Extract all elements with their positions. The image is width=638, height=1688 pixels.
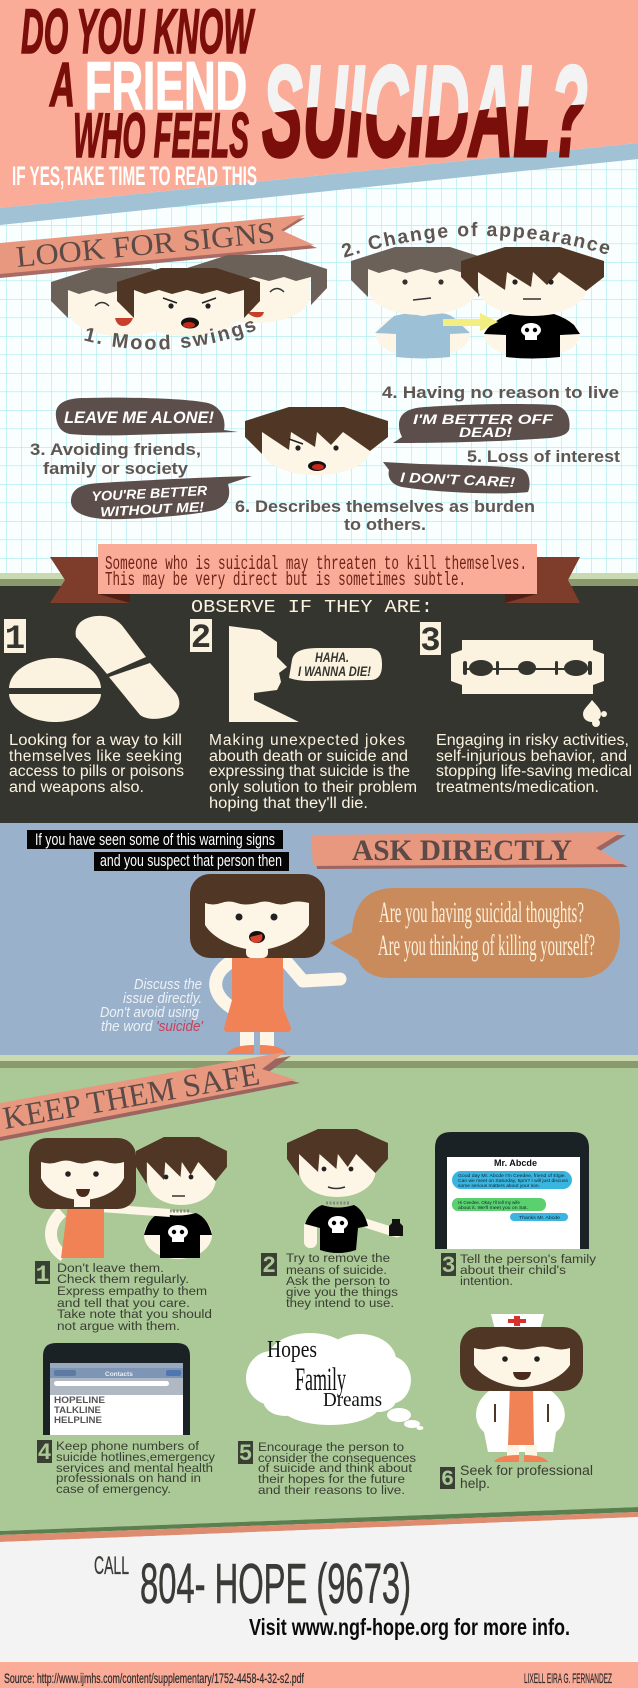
shoes <box>227 1045 254 1054</box>
icon: pills <box>9 616 179 722</box>
text: safe 6: Seek for professional <box>460 1462 593 1478</box>
ribbon: look for signs: LOOK FOR SIGNS <box>15 216 276 274</box>
text: safe 5: of suicide and think about <box>258 1461 413 1475</box>
sign: 3 avoiding friends <box>30 440 201 478</box>
text: item 2: Making unexpected jokes <box>209 732 405 749</box>
cloud: hopes family dreams: Dreams <box>323 1389 382 1411</box>
phone: text messages: Thanks Mr. Abcde <box>519 1215 561 1220</box>
coat <box>476 1385 565 1452</box>
panel: title header: WHO FEELS <box>73 101 249 171</box>
title: suicidal <box>262 64 588 159</box>
phone: text messages: Can we meet on Saturday, 5pm? I will just discuss <box>458 1178 569 1183</box>
blue diagonal band <box>0 143 638 225</box>
text: item 2 <box>209 732 417 812</box>
text: safe 1: Don't leave them. <box>57 1261 164 1275</box>
text: item 3: treatments/medication. <box>436 779 599 796</box>
number tile 5: 5 <box>239 1441 252 1467</box>
text: safe 1: Check them regularly. <box>57 1272 189 1286</box>
cloud: hopes family dreams <box>246 1333 424 1430</box>
number 2: 2 <box>191 620 211 658</box>
icon: bottle <box>389 1219 403 1236</box>
text: safe 5 <box>258 1440 416 1497</box>
head: happy right <box>184 255 327 323</box>
text: item 3: Engaging in risky activities, <box>436 732 629 749</box>
phone: text messages: some serious matters about your son. <box>458 1183 540 1188</box>
note: discuss directly: issue directly. <box>123 990 202 1007</box>
text: item 3: stopping life-saving medical <box>436 763 632 780</box>
panel: call to action <box>0 1517 638 1662</box>
text: item 1: and weapons also. <box>9 779 144 796</box>
black caption: warning signs <box>27 830 289 871</box>
text: safe 3: intention. <box>460 1274 513 1288</box>
label: 2 change of appearance: 2. Change of appearance <box>342 222 610 258</box>
girl face <box>41 1160 124 1200</box>
bubble: haha: I WANNA DIE! <box>298 664 371 679</box>
phone: text messages: about it. We'll meet you on Sat. <box>458 1205 528 1210</box>
text: safe 3 <box>460 1252 597 1288</box>
source: Source: http://www.ijmhs.com/content/supplementary/1752-4458-4-32-s2.pdf <box>4 1670 304 1686</box>
illustration: boy with bottle <box>287 1129 403 1253</box>
note: discuss directly: Don't avoid using <box>100 1004 200 1021</box>
girl dress <box>61 1204 104 1258</box>
text: safe 4: professionals on hand in <box>56 1471 201 1485</box>
hair <box>460 1327 583 1391</box>
bubble: i don't care: I DON'T CARE! <box>400 469 516 490</box>
phone: contacts: HELPLINE <box>54 1415 102 1426</box>
text: safe 2: Ask the person to <box>286 1274 390 1288</box>
panel: ask directly blue section <box>0 823 638 1055</box>
bubble: you're better without me: YOU'RE BETTER <box>91 483 208 504</box>
bubble: i'm better off dead: DEAD! <box>459 425 513 440</box>
bubble: haha <box>289 648 382 681</box>
text: safe 2: means of suicide. <box>286 1263 387 1277</box>
text: item 3: self-injurious behavior, and <box>436 748 627 765</box>
phone: text messages: Good day Mr. Abcde I'm Ceedee, friend of Elgie. <box>458 1173 566 1178</box>
text: item 1: themselves like seeking <box>9 748 182 765</box>
number tile 4: 4 <box>38 1440 52 1466</box>
text: item 1: Looking for a way to kill <box>9 732 182 749</box>
text: item 2: abouth death or suicide and <box>209 748 408 765</box>
text: safe 6: help. <box>460 1475 490 1491</box>
subtitle: IF YES,TAKE TIME TO READ THIS <box>12 161 257 191</box>
head: happy left <box>51 268 194 336</box>
sign: 3 avoiding friends: 3. Avoiding friends, <box>30 440 201 459</box>
text: safe 4: services and mental health <box>56 1461 213 1475</box>
text: item 2: expressing that suicide is the <box>209 763 410 780</box>
text: safe 1: not argue with them. <box>57 1319 180 1333</box>
phone: contacts <box>43 1343 190 1435</box>
legs and shoes <box>507 1445 519 1456</box>
text: safe 5: Encourage the person to <box>258 1440 404 1454</box>
note: discuss directly: the word 'suicide' <box>101 1018 204 1035</box>
ribbon: keep them safe: KEEP THEM SAFE <box>0 1055 262 1136</box>
phone number: 804- HOPE (9673) <box>140 1552 411 1616</box>
illustration: mood swings heads <box>51 255 327 336</box>
bubble: haha: HAHA. <box>315 650 349 665</box>
footer <box>0 1662 638 1688</box>
arrow: yellow <box>443 313 498 331</box>
sign: 6 describes themselves: to others. <box>344 515 426 534</box>
number 1: 1 <box>5 621 25 659</box>
dress <box>224 951 291 1032</box>
background: signs grid <box>0 140 638 580</box>
text: safe 5: their hopes for the future <box>258 1472 405 1486</box>
text: safe 1: Express empathy to them <box>57 1284 207 1298</box>
panel: keep them safe green section <box>0 1052 638 1542</box>
sign: 6 describes themselves: 6. Describes themselves as burden <box>235 497 535 516</box>
note: discuss directly: Discuss the <box>134 976 202 993</box>
dress <box>508 1385 534 1445</box>
number tile 6: 6 <box>441 1467 454 1492</box>
text: safe 2: Try to remove the <box>286 1251 390 1265</box>
bubble: i'm better off dead <box>393 404 570 443</box>
ribbon: ask directly <box>311 832 628 869</box>
number tile 2: 2 <box>262 1253 276 1279</box>
panel: title header <box>0 0 638 225</box>
bubble: i don't care <box>383 462 530 493</box>
face <box>205 902 309 950</box>
text: item 1 <box>9 732 184 796</box>
red cross <box>508 1316 526 1326</box>
text: safe 3: about their child's <box>460 1263 566 1277</box>
phone: contacts: HOPELINE <box>54 1395 105 1406</box>
bubble: leave me alone: LEAVE ME ALONE! <box>64 408 214 427</box>
black caption: warning signs: If you have seen some of this warning signs <box>35 830 275 849</box>
number 3: 3 <box>420 623 441 661</box>
text: safe 1: and tell that you care. <box>57 1296 190 1310</box>
text: item 3 <box>436 732 632 796</box>
title: friend: FRIEND <box>85 48 247 124</box>
nurse cap <box>491 1314 544 1330</box>
text: safe 5: consider the consequences <box>258 1451 416 1465</box>
ribbon: look for signs <box>0 215 317 278</box>
illustration: nurse <box>460 1314 583 1462</box>
bubble: are you having suicidal thoughts <box>330 888 620 978</box>
text: safe 2: give you the things <box>286 1285 398 1299</box>
arms <box>216 960 234 1008</box>
bubble: you're better without me: WITHOUT ME! <box>100 499 205 520</box>
ribbon: ask directly: ASK DIRECTLY <box>352 834 572 867</box>
bubble: you're better without me <box>71 476 252 520</box>
text: item 1: access to pills or poisons <box>9 763 184 780</box>
panel: observe dark section <box>0 544 638 823</box>
cloud: hopes family dreams: Family <box>295 1362 346 1398</box>
text: safe 4: Keep phone numbers of <box>56 1439 200 1453</box>
girl arm <box>51 1212 64 1256</box>
label: 1 mood swings <box>84 321 256 350</box>
callout: warning box: This may be very direct but is sometimes subtle. <box>105 569 466 591</box>
text: safe 4: suicide hotlines,emergency <box>56 1450 216 1464</box>
text: safe 1 <box>57 1261 212 1333</box>
sign: 4 having no reason to live: 4. Having no reason to live <box>382 383 619 402</box>
illustration: girl speaking <box>190 874 340 1054</box>
text: safe 2 <box>286 1251 398 1310</box>
text: safe 6 <box>460 1462 593 1491</box>
note: discuss directly <box>100 976 204 1035</box>
boy body <box>144 1211 212 1259</box>
ribbon tails <box>50 557 580 603</box>
phone: text messages: Hi Ceedee. Okay I'll tell my wife <box>458 1200 520 1205</box>
title: a: A <box>49 51 75 120</box>
text: safe 4 <box>56 1439 216 1496</box>
illustration: change of appearance <box>351 247 604 358</box>
sign: 6 describes themselves <box>235 497 535 534</box>
phone: contacts: TALKLINE <box>54 1405 101 1416</box>
text: item 2: hoping that they'll die. <box>209 795 368 812</box>
face <box>474 1346 570 1387</box>
boy head <box>136 1137 227 1205</box>
text: safe 2: they intend to use. <box>286 1296 394 1310</box>
icon: profile face <box>229 626 299 722</box>
text: item 2: only solution to their problem <box>209 779 417 796</box>
icon: razor blade <box>451 640 604 694</box>
label: 1 mood swings: 1. Mood swings <box>84 321 256 350</box>
person: after <box>461 247 604 358</box>
cloud: hopes family dreams: Hopes <box>267 1337 317 1363</box>
head: center shouting <box>245 407 388 475</box>
text: safe 3: Tell the person's family <box>460 1252 597 1266</box>
number tile 3: 3 <box>442 1253 455 1279</box>
hair <box>190 874 325 958</box>
legs <box>240 1032 254 1046</box>
heading: observe: OBSERVE IF THEY ARE: <box>191 598 433 618</box>
bubble: i'm better off dead: I'M BETTER OFF <box>413 412 554 427</box>
head: angry front <box>117 268 260 336</box>
person: before <box>351 247 494 358</box>
number tile 1: 1 <box>36 1262 49 1288</box>
bubble: leave me alone <box>56 398 238 435</box>
illustration: girl and boy <box>29 1137 227 1259</box>
text: safe 4: case of emergency. <box>56 1482 171 1496</box>
icon: blood drops <box>583 700 607 727</box>
callout: warning box <box>98 544 537 594</box>
phone: contacts: Contacts <box>105 1371 133 1378</box>
call label: CALL <box>94 1552 129 1580</box>
sign: 3 avoiding friends: family or society <box>43 459 189 478</box>
text: safe 5: and their reasons to live. <box>258 1483 405 1497</box>
phone: text messages <box>435 1132 589 1249</box>
sign: 5 loss of interest: 5. Loss of interest <box>467 447 620 466</box>
black caption: warning signs: and you suspect that person then <box>100 851 282 870</box>
girl hair <box>29 1138 136 1209</box>
text: safe 1: Take note that you should <box>57 1307 212 1321</box>
phone: text messages: Mr. Abcde <box>494 1158 537 1169</box>
